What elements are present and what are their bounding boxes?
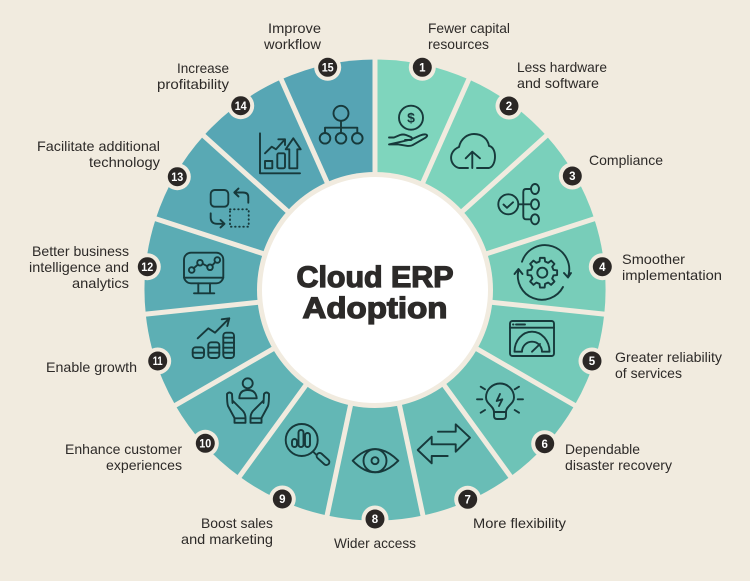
label 15: workflow bbox=[263, 36, 322, 52]
icon: gear with arrows bbox=[514, 245, 571, 300]
badge 10 bbox=[192, 430, 219, 457]
badge 5 bbox=[578, 348, 606, 374]
badge 6 bbox=[531, 430, 558, 457]
label 8: Wider access bbox=[334, 535, 416, 551]
icon: two-way arrows bbox=[418, 424, 470, 463]
icon: magnifier with bars bbox=[286, 424, 331, 466]
label 12: analytics bbox=[72, 275, 129, 291]
label 2: and software bbox=[517, 75, 599, 91]
badge 15 bbox=[314, 54, 341, 81]
badge 11 bbox=[144, 348, 171, 374]
badge 4 bbox=[589, 253, 616, 280]
label 2 bbox=[517, 59, 607, 91]
label 5: Greater reliability bbox=[615, 349, 722, 365]
label 10 bbox=[65, 441, 182, 473]
icon: hands holding person bbox=[227, 378, 269, 423]
icon: hand holding coin: $ bbox=[407, 110, 415, 126]
icon: cloud upload bbox=[451, 134, 495, 168]
icon: growth coins bbox=[193, 318, 234, 358]
badge 13 bbox=[164, 163, 191, 190]
badge 3: 3 bbox=[569, 171, 576, 183]
label 4 bbox=[622, 251, 722, 283]
badge 6: 6 bbox=[541, 439, 548, 451]
badge 8 bbox=[362, 506, 388, 532]
label 1: Fewer capital bbox=[428, 20, 510, 36]
label 9 bbox=[181, 515, 273, 547]
badge 10: 10 bbox=[199, 438, 211, 450]
icon: org chart bbox=[320, 106, 363, 144]
title: Cloud ERP bbox=[296, 261, 454, 294]
badge 7: 7 bbox=[464, 494, 471, 506]
icon: migration squares bbox=[211, 188, 249, 228]
icon: eye bbox=[353, 449, 398, 472]
label 14 bbox=[157, 60, 229, 92]
label 14: Increase bbox=[177, 60, 229, 76]
label 12 bbox=[29, 243, 129, 291]
icon: browser gauge bbox=[510, 321, 554, 356]
badge 14: 14 bbox=[235, 101, 247, 113]
label 14: profitability bbox=[157, 76, 229, 92]
badge 8: 8 bbox=[372, 514, 379, 526]
badge 15: 15 bbox=[322, 62, 334, 74]
badge 12 bbox=[134, 253, 161, 280]
label 15: Improve bbox=[268, 20, 321, 36]
badge 2 bbox=[496, 92, 522, 120]
label 4: Smoother bbox=[622, 251, 685, 267]
icon: light bulb bbox=[477, 384, 523, 419]
label 12: intelligence and bbox=[29, 259, 129, 275]
ring of 15 segments bbox=[128, 41, 623, 535]
label 5 bbox=[615, 349, 722, 381]
badge 1: 1 bbox=[419, 62, 426, 74]
badge 7 bbox=[454, 486, 481, 513]
badge 2: 2 bbox=[506, 101, 512, 113]
label 6 bbox=[565, 441, 672, 473]
badge 4: 4 bbox=[599, 262, 606, 274]
badge 9: 9 bbox=[279, 494, 286, 506]
title bbox=[296, 261, 454, 325]
label 5: of services bbox=[615, 365, 682, 381]
label 13 bbox=[37, 138, 160, 170]
label 1: resources bbox=[428, 36, 489, 52]
label 1 bbox=[428, 20, 510, 52]
icon: profit chart bbox=[260, 133, 301, 173]
icon: monitor chart bbox=[184, 253, 223, 293]
label 9: and marketing bbox=[181, 531, 273, 547]
label 10: experiences bbox=[106, 457, 182, 473]
badge 3 bbox=[559, 162, 586, 190]
label 6: disaster recovery bbox=[565, 457, 672, 473]
label 4: implementation bbox=[622, 267, 722, 283]
badge 11: 11 bbox=[153, 356, 163, 368]
label 7: More flexibility bbox=[473, 515, 566, 531]
label 12: Better business bbox=[32, 243, 129, 259]
label 11: Enable growth bbox=[46, 359, 137, 375]
label 15 bbox=[263, 20, 322, 52]
label 13: technology bbox=[89, 154, 160, 170]
label 2: Less hardware bbox=[517, 59, 607, 75]
icon: hand holding coin bbox=[389, 106, 427, 146]
title: Adoption bbox=[302, 292, 448, 325]
badge 5: 5 bbox=[589, 356, 596, 368]
badge 12: 12 bbox=[141, 262, 153, 274]
badge 9 bbox=[269, 486, 296, 512]
label 3: Compliance bbox=[589, 152, 663, 168]
center circle bbox=[257, 172, 493, 408]
icon: compliance check tree bbox=[498, 184, 539, 224]
badge 13: 13 bbox=[171, 172, 183, 184]
label 6: Dependable bbox=[565, 441, 640, 457]
badge 14 bbox=[227, 92, 254, 119]
badge 1 bbox=[409, 54, 436, 81]
label 10: Enhance customer bbox=[65, 441, 182, 457]
label 9: Boost sales bbox=[201, 515, 273, 531]
label 13: Facilitate additional bbox=[37, 138, 160, 154]
